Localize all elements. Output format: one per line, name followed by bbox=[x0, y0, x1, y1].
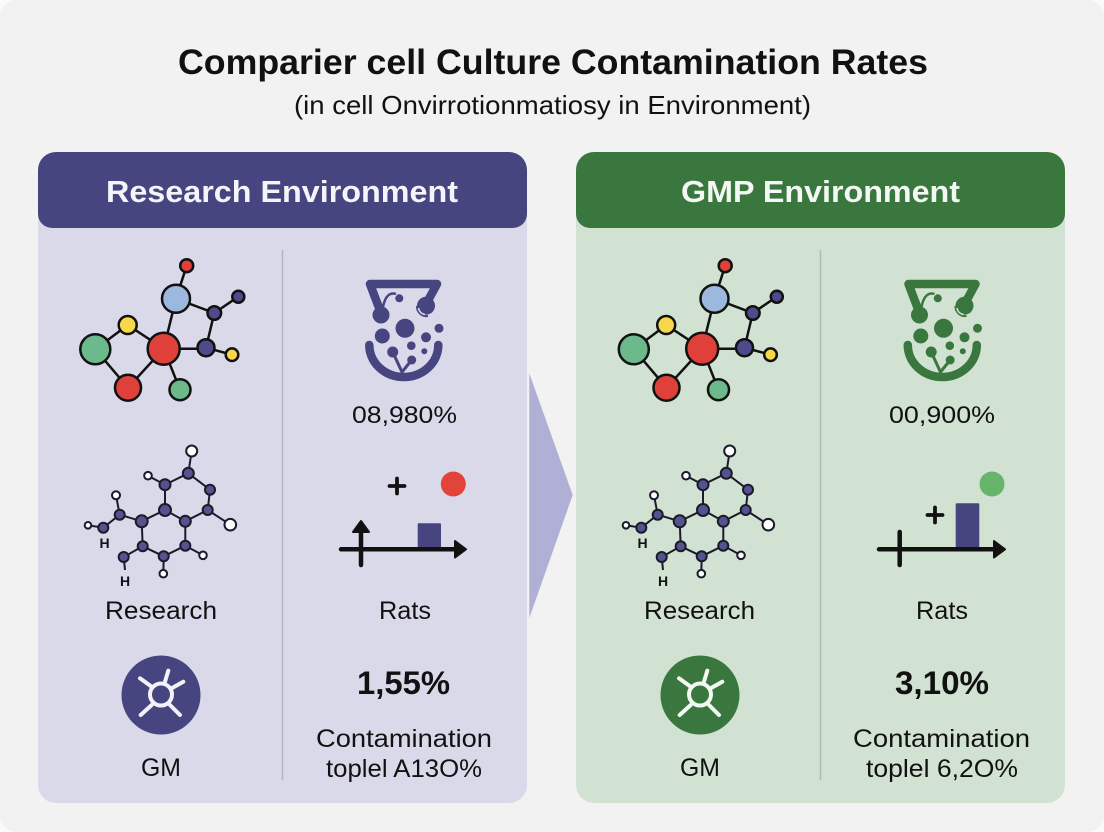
contamination text: Contamination bbox=[316, 725, 492, 753]
label: research: Research bbox=[644, 597, 755, 625]
label: research: Research bbox=[105, 597, 217, 625]
contamination text: Contamination bbox=[853, 725, 1030, 753]
icon: contamination flask bbox=[908, 284, 982, 377]
icon: chemical structure bbox=[85, 446, 236, 589]
value: 1,55%: 1,55% bbox=[357, 665, 450, 701]
label: GM: GM bbox=[680, 754, 720, 782]
label: GM: GM bbox=[141, 754, 181, 782]
panel background bbox=[576, 152, 1065, 803]
label: rats: Rats bbox=[916, 597, 968, 625]
panel header: Research Environment bbox=[106, 174, 458, 209]
title: Comparier cell Culture Contamination Rates bbox=[178, 43, 928, 82]
value: rate: 00,900% bbox=[889, 402, 995, 429]
icon: chemical structure: H bbox=[120, 573, 130, 589]
contamination text bbox=[316, 725, 492, 783]
icon: GM badge bbox=[122, 656, 200, 734]
label: rats: Rats bbox=[379, 597, 431, 625]
contamination text: toplel 6,2O% bbox=[866, 755, 1018, 783]
icon: chemical structure: H bbox=[100, 535, 110, 551]
icon: GM badge bbox=[660, 656, 740, 734]
contamination text: toplel A13O% bbox=[326, 755, 482, 783]
icon: molecule network bbox=[619, 259, 783, 401]
subtitle: (in cell Onvirrotionmatiosy in Environment) bbox=[294, 90, 811, 120]
panel background bbox=[38, 152, 527, 803]
icon: chemical structure bbox=[623, 446, 774, 589]
icon: contamination flask bbox=[369, 284, 444, 377]
arrow bbox=[529, 373, 573, 618]
panel header bbox=[38, 152, 527, 228]
panel header: GMP Environment bbox=[681, 174, 960, 209]
icon: chemical structure: H bbox=[658, 573, 668, 589]
bar chart: rate bbox=[341, 472, 466, 565]
contamination text bbox=[853, 725, 1030, 783]
panel: research environment bbox=[38, 152, 527, 803]
panel: GMP environment bbox=[576, 152, 1065, 803]
value: rate: 08,980% bbox=[352, 402, 457, 429]
value: 3,10%: 3,10% bbox=[895, 665, 989, 701]
bar chart: rate bbox=[879, 472, 1005, 565]
icon: molecule network bbox=[80, 259, 244, 401]
panel header bbox=[576, 152, 1065, 228]
icon: chemical structure: H bbox=[638, 535, 648, 551]
